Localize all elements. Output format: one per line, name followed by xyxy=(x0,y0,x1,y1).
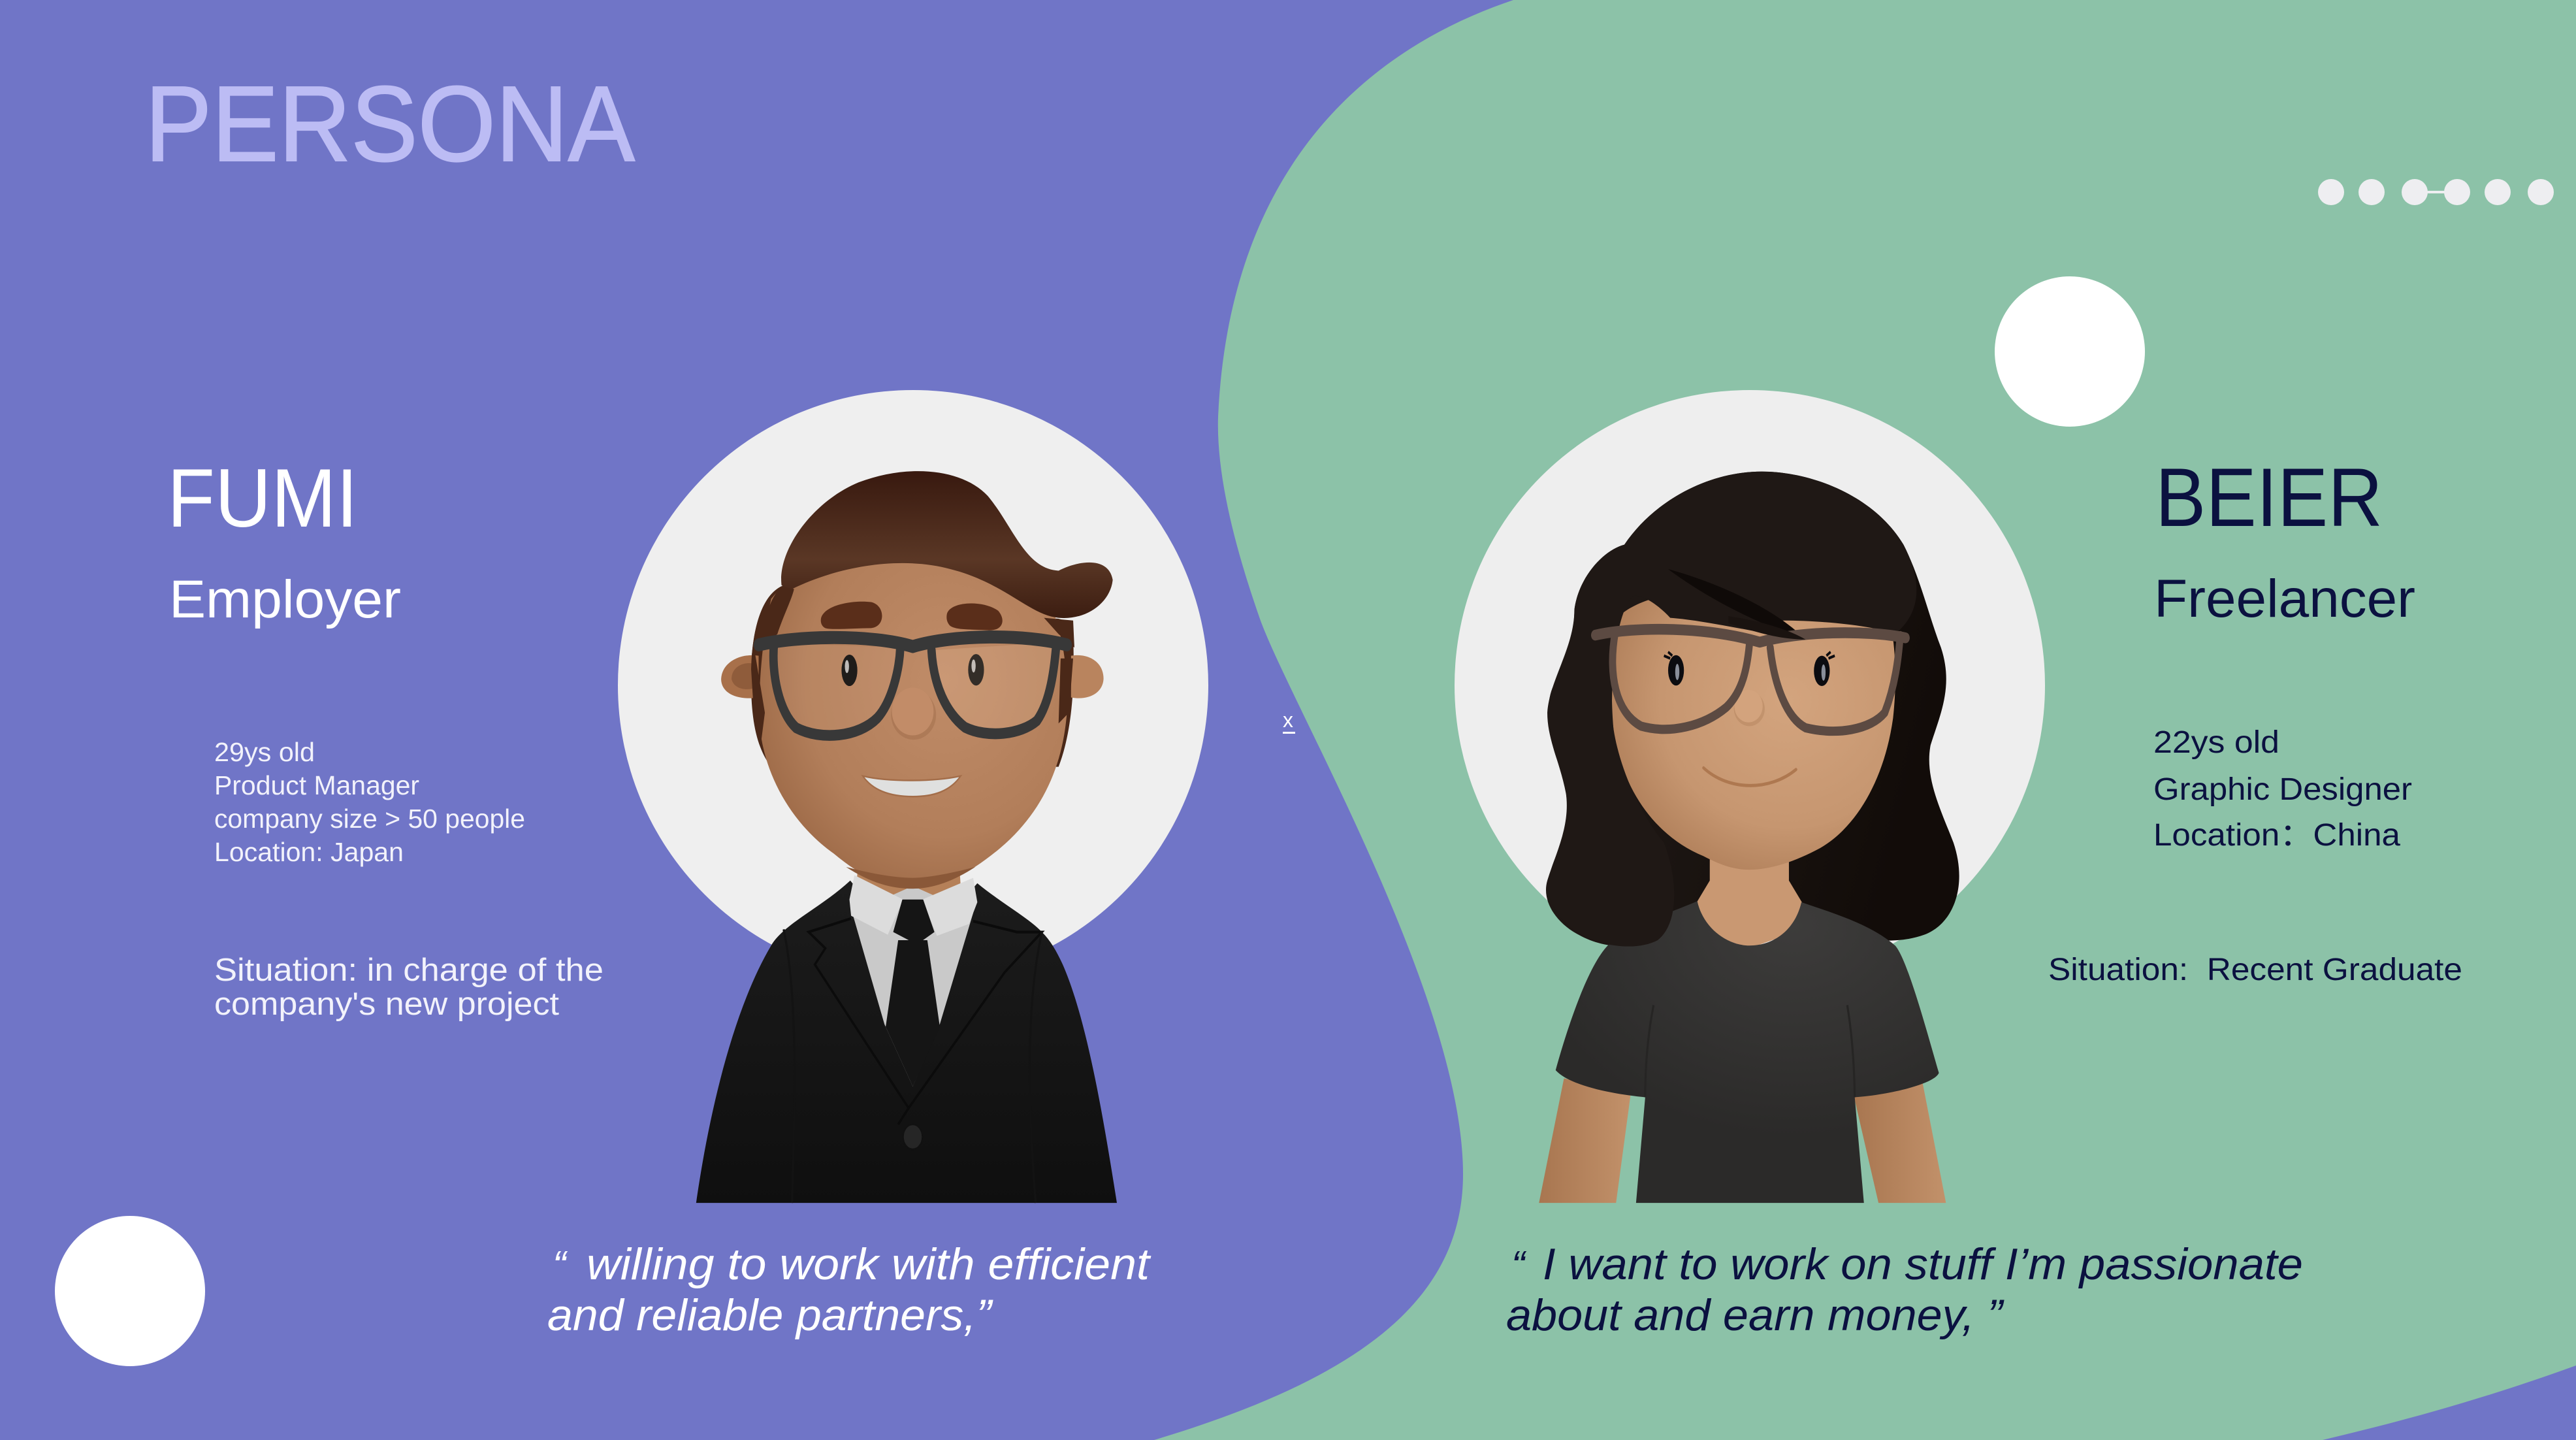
quote: Beier: “ xyxy=(1511,1243,1527,1288)
arms xyxy=(1539,1078,1946,1203)
collar xyxy=(850,875,977,936)
background green blob xyxy=(1154,0,2576,1440)
role: Employer: Employer xyxy=(169,570,401,629)
eyes xyxy=(1664,652,1835,686)
decorative white circle top right xyxy=(1995,276,2145,427)
details list: Location：China xyxy=(2153,818,2400,853)
chin shadow xyxy=(846,867,975,889)
quote: Fumi: “ xyxy=(553,1243,568,1288)
t-shirt xyxy=(1556,901,1939,1203)
temple hair xyxy=(751,585,1074,745)
mouth xyxy=(863,776,961,796)
glasses xyxy=(1595,629,1906,731)
smile xyxy=(1703,768,1796,785)
details list xyxy=(2153,725,2412,853)
eyes xyxy=(841,654,984,686)
nose xyxy=(891,688,936,740)
quote: Fumi: willing to work with efficient xyxy=(587,1239,1151,1289)
situation text: Situation: in charge of the xyxy=(214,953,604,988)
name: FUMI: FUMI xyxy=(167,451,358,544)
suit jacket xyxy=(696,881,1117,1203)
shirt xyxy=(852,886,973,1087)
situation text: Situation: Recent Graduate xyxy=(2048,953,2462,987)
name: BEIER: BEIER xyxy=(2155,451,2383,544)
details list: 29ys old xyxy=(214,737,315,767)
ears xyxy=(721,655,1104,698)
details list: Product Manager xyxy=(214,770,419,800)
panel: Fumi profile text xyxy=(167,451,604,1022)
pagination dots xyxy=(2318,179,2554,205)
situation text: company's new project xyxy=(214,987,559,1022)
avatar backdrop: Fumi xyxy=(618,390,1208,981)
details list: Location: Japan xyxy=(214,837,404,867)
sleeve creases xyxy=(1645,1005,1855,1097)
panel: Beier profile text xyxy=(2048,451,2462,987)
details list: 22ys old xyxy=(2153,725,2279,760)
situation text xyxy=(214,953,604,1022)
role: Freelancer: Freelancer xyxy=(2154,569,2415,629)
title: PERSONA xyxy=(145,64,636,184)
fringe tip over glasses xyxy=(1728,616,1805,640)
avatar backdrop: Beier xyxy=(1455,390,2045,981)
neck xyxy=(1695,843,1803,948)
details list xyxy=(214,737,525,867)
front hair and fringe xyxy=(1549,472,1916,947)
details list: Graphic Designer xyxy=(2153,772,2412,807)
illustration: Beier avatar xyxy=(1539,472,1959,1203)
quote: Fumi: and reliable partners,” xyxy=(547,1290,993,1340)
hair back xyxy=(1546,472,1959,947)
details list: company size > 50 people xyxy=(214,804,525,834)
hair strand xyxy=(1668,569,1805,640)
back hair xyxy=(751,585,1074,767)
eyebrows xyxy=(821,602,1003,630)
jacket button xyxy=(903,1124,922,1149)
glasses xyxy=(758,637,1067,736)
illustration: Fumi avatar xyxy=(696,471,1117,1203)
quote: Beier: about and earn money, ” xyxy=(1506,1290,2004,1340)
quote: Beier: I want to work on stuff I’m passionate xyxy=(1543,1239,2303,1289)
head xyxy=(1612,587,1895,870)
necktie xyxy=(886,900,940,1087)
nose xyxy=(1734,690,1765,726)
quote: Fumi xyxy=(547,1239,1151,1340)
jacket lapels xyxy=(784,919,1042,1203)
stray x mark: x xyxy=(1283,708,1293,732)
top hair xyxy=(781,471,1113,618)
decorative white circle bottom left xyxy=(55,1216,205,1366)
head xyxy=(760,540,1067,889)
quote: Beier xyxy=(1506,1239,2303,1340)
neck xyxy=(856,853,961,908)
